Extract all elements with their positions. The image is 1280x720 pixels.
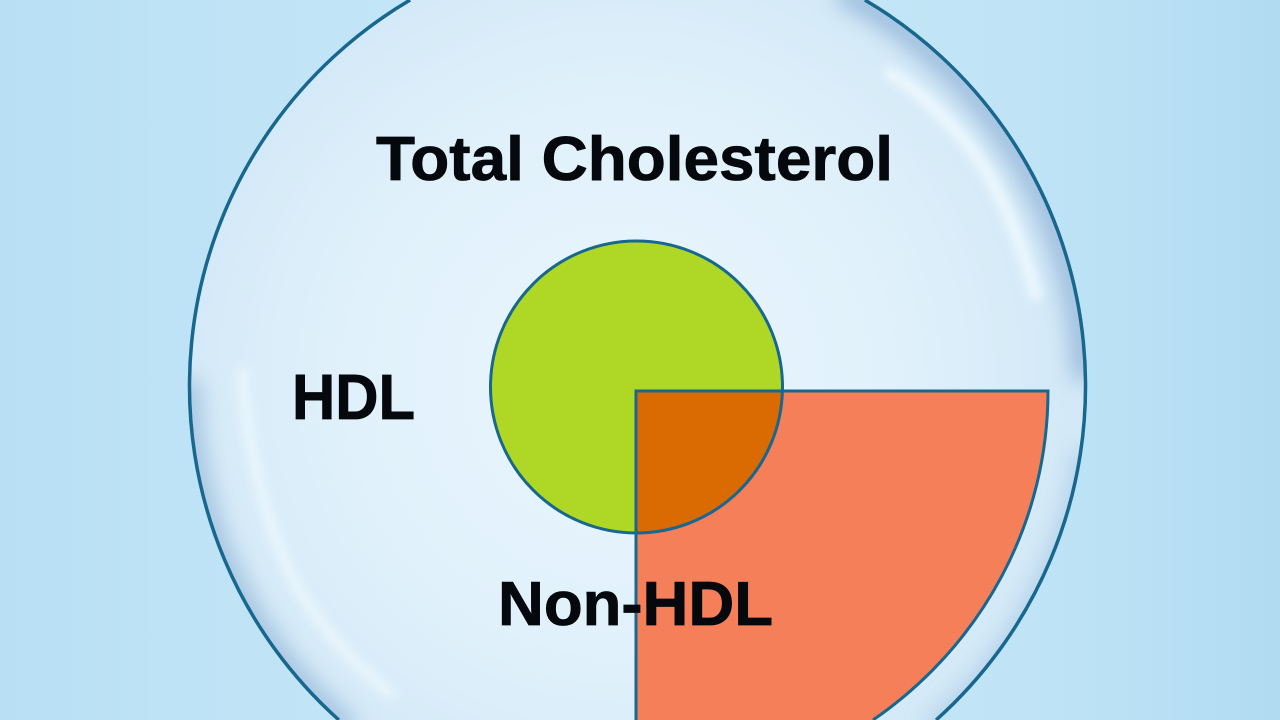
green circle: HDL [490, 241, 782, 533]
quarter shape: non-HDL [636, 391, 1048, 720]
label: Non-HDL: Non-HDL [498, 570, 773, 639]
highlight: upper right rim [890, 73, 1036, 295]
highlight: left rim [243, 373, 390, 693]
outer circle: total cholesterol [188, 0, 1086, 720]
heading: Total Cholesterol: Total Cholesterol [376, 125, 893, 194]
label: HDL: HDL [292, 361, 415, 433]
overlap of HDL and non-HDL [636, 391, 782, 533]
infographic: total cholesterol diagram [188, 0, 1088, 720]
